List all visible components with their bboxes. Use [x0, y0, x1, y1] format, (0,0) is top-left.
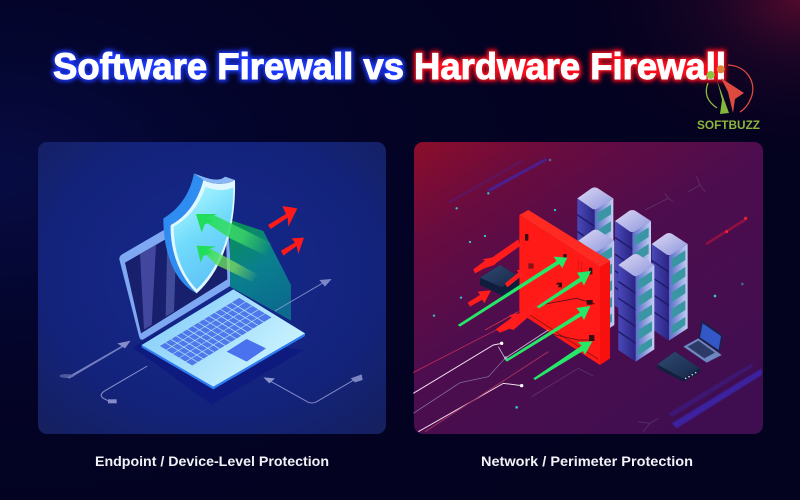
- panel: software firewall illustration: [38, 142, 386, 434]
- small network appliance left: [480, 265, 519, 297]
- panel: hardware firewall illustration: [412, 142, 763, 434]
- logo: softbuzz: [697, 65, 760, 132]
- server towers right of wall: [618, 233, 688, 362]
- mini laptop: [683, 320, 723, 363]
- green passing arrows: [458, 257, 592, 380]
- router bottom right: [657, 352, 700, 382]
- thin arrow left: [59, 341, 131, 379]
- logo: softbuzz: SOFTBUZZ: [697, 120, 760, 132]
- caption: endpoint protection: Endpoint / Device-Level Protection: [95, 453, 329, 469]
- red incoming arrows: [468, 239, 559, 333]
- title: hardware firewall: Hardware Firewall: [414, 45, 726, 87]
- translucent teal firewall panel: [230, 220, 291, 321]
- laptop screen: [119, 193, 232, 340]
- keyboard: [160, 298, 271, 366]
- green arrows through shield: [196, 214, 272, 282]
- title: software firewall: Software Firewall vs: [53, 45, 404, 87]
- circuit traces and streaks: [412, 312, 548, 432]
- server towers behind wall: [577, 187, 651, 337]
- title: [53, 45, 726, 87]
- cable right: [263, 374, 363, 403]
- laptop shadow: [133, 330, 304, 405]
- thin outbound arrow right: [275, 279, 332, 311]
- background streaks and nodes: [433, 158, 762, 432]
- red firewall wall: [519, 210, 610, 365]
- caption: network protection: Network / Perimeter Protection: [481, 453, 693, 469]
- red deflected arrows: [268, 206, 304, 256]
- title: software firewall: Software Firewall vs: [53, 45, 404, 87]
- title: hardware firewall: Hardware Firewall: [414, 45, 726, 87]
- laptop base: [142, 289, 305, 389]
- touchpad: [227, 339, 266, 362]
- shield: [163, 173, 235, 293]
- cable left: [101, 366, 147, 403]
